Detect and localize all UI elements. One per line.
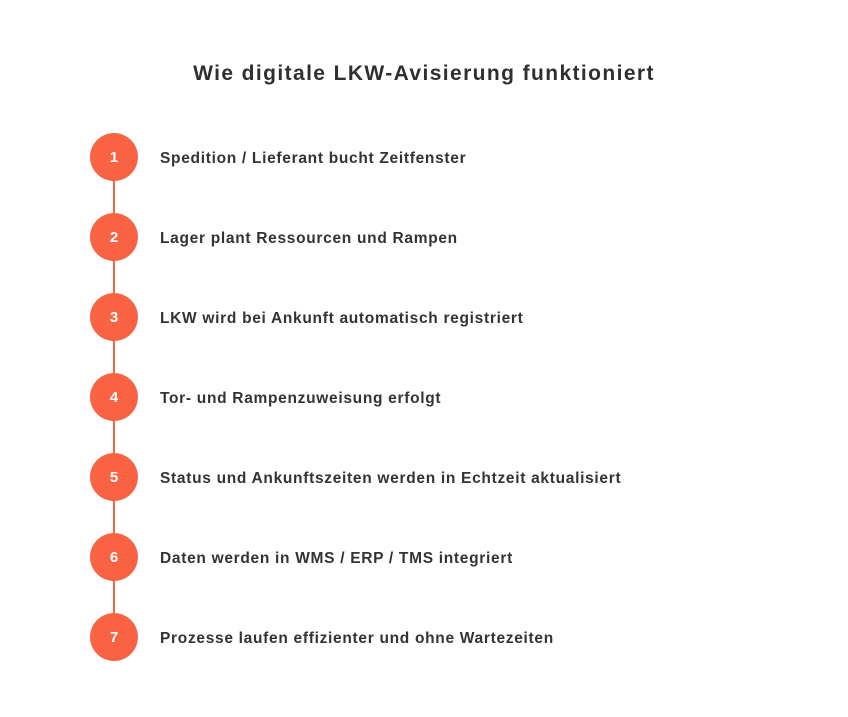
step 5 text: Status und Ankunftszeiten werden in Echtzeit aktualisiert xyxy=(160,470,621,487)
step 3 text: LKW wird bei Ankunft automatisch registriert xyxy=(160,310,524,327)
step 4 text: Tor- und Rampenzuweisung erfolgt xyxy=(160,390,441,407)
step 5 circle xyxy=(90,453,138,501)
step 2 circle: 2 xyxy=(110,229,118,246)
step 3 circle: 3 xyxy=(110,309,118,326)
step 4 circle: 4 xyxy=(110,389,118,406)
connector line xyxy=(113,157,115,637)
title: Wie digitale LKW-Avisierung funktioniert xyxy=(193,62,655,85)
step 2 text: Lager plant Ressourcen und Rampen xyxy=(160,230,458,247)
step 4 circle xyxy=(90,373,138,421)
step 2 circle xyxy=(90,213,138,261)
step 5 circle: 5 xyxy=(110,469,118,486)
step 1 circle: 1 xyxy=(110,149,118,166)
step 6 text: Daten werden in WMS / ERP / TMS integriert xyxy=(160,550,513,567)
step 7 circle xyxy=(90,613,138,661)
step 6 circle: 6 xyxy=(110,549,118,566)
step 1 text: Spedition / Lieferant bucht Zeitfenster xyxy=(160,150,466,167)
step 6 circle xyxy=(90,533,138,581)
step 7 text: Prozesse laufen effizienter und ohne Wartezeiten xyxy=(160,630,554,647)
step 7 circle: 7 xyxy=(110,629,118,646)
step 3 circle xyxy=(90,293,138,341)
step 1 circle xyxy=(90,133,138,181)
